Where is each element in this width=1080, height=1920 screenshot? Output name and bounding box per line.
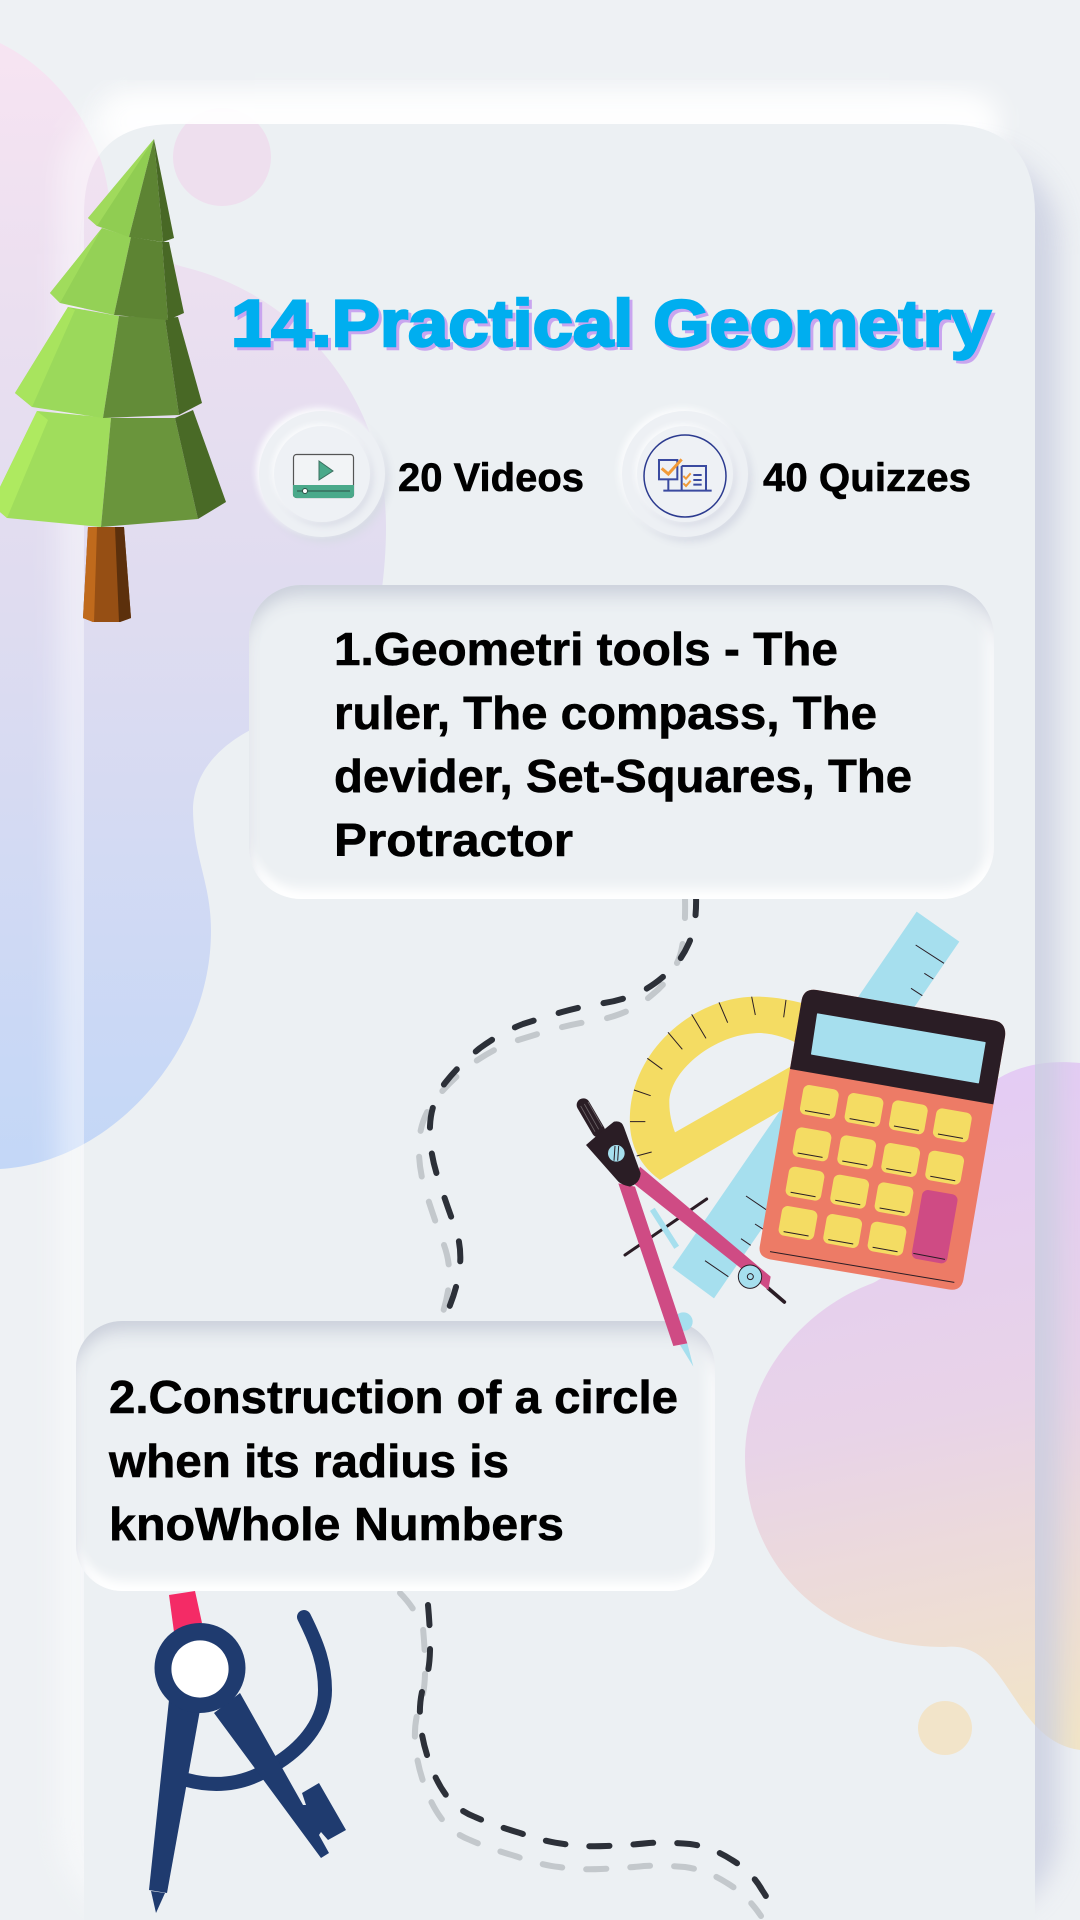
icon: quiz badge <box>622 411 748 537</box>
panel: geometry tools <box>249 585 994 899</box>
calculator <box>760 990 1005 1290</box>
panel: construction of a circle: knoWhole Numbers <box>109 1498 564 1550</box>
panel: construction of a circle: 2.Construction of a circle <box>109 1371 678 1423</box>
ruler <box>672 912 959 1298</box>
icon: pine tree <box>0 139 226 622</box>
divider <box>581 1102 784 1367</box>
panel: geometry tools: ruler, The compass, The <box>334 687 877 739</box>
icon: navy compass <box>149 1591 346 1913</box>
title: 14.Practical Geometry <box>231 286 991 360</box>
text: 20 Videos: 20 Videos <box>398 456 584 500</box>
panel: geometry tools: devider, Set-Squares, The <box>334 750 912 802</box>
text: 40 Quizzes: 40 Quizzes <box>763 456 971 500</box>
panel: construction of a circle <box>76 1321 715 1591</box>
protractor <box>630 997 803 1180</box>
panel: geometry tools: 1.Geometri tools - The <box>334 623 838 675</box>
panel: geometry tools: Protractor <box>334 814 573 866</box>
icon: tools illustration <box>581 912 1005 1367</box>
icon: video badge <box>259 411 385 537</box>
panel: construction of a circle: when its radius is <box>108 1435 509 1487</box>
